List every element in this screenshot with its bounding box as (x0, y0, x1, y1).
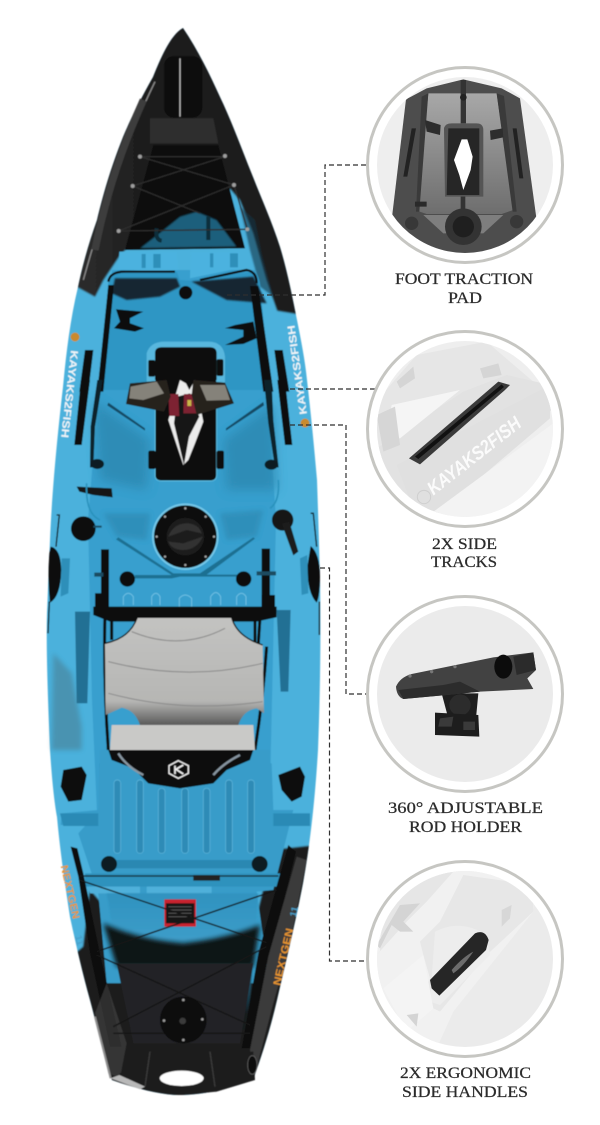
cockpit floor top (100, 270, 270, 390)
floor channels (114, 780, 254, 853)
faded deck picture (378, 872, 528, 1028)
disc (377, 77, 553, 253)
label: side handles: SIDE HANDLES (402, 1084, 528, 1101)
footwell holes (101, 856, 117, 872)
label: foot traction pad: PAD (448, 290, 482, 307)
right rear rail (242, 845, 296, 1048)
bow carry handle recess (164, 56, 202, 118)
label: side handles: 2X ERGONOMIC (400, 1065, 531, 1082)
round deck hatch (152, 503, 219, 570)
brand logo right (300, 418, 310, 428)
callout connector: rod holder (290, 425, 377, 694)
hull base colour (46, 28, 322, 1096)
model number left: 11 (72, 934, 85, 947)
bungee cords (119, 157, 247, 231)
brand text left: KAYAKS2FISH (58, 350, 80, 438)
callout connector: side handles (320, 568, 377, 961)
feature 1: foot traction pad (368, 68, 562, 262)
centre hatch (155, 380, 217, 481)
seat logo (169, 761, 188, 778)
rear tank well (107, 893, 258, 1043)
feature 4: side handles (363, 862, 562, 1056)
footwell (78, 763, 293, 983)
label: side handles (400, 1065, 531, 1101)
label: foot traction pad (395, 271, 533, 307)
label: side tracks: 2X SIDE (432, 536, 497, 553)
model text left: NEXTGEN (58, 864, 81, 920)
label: rod holder: 360° ADJUSTABLE (388, 800, 543, 817)
stern bottom (115, 1052, 255, 1095)
bungee anchors (117, 154, 249, 233)
stern details (58, 749, 310, 1095)
cockpit rails (97, 285, 273, 392)
label: foot traction pad: FOOT TRACTION (395, 271, 533, 288)
feature 3: rod holder (368, 596, 562, 792)
cockpit step line (86, 480, 279, 520)
floor holes (120, 571, 135, 587)
blue splash inside well (140, 212, 237, 248)
stern hull bands (95, 983, 127, 1078)
seat stitching (108, 628, 263, 706)
ring (368, 332, 562, 526)
cockpit floor (88, 270, 276, 810)
gunwale highlights (83, 82, 155, 280)
speaker mounts left (61, 767, 87, 802)
seat cushion (110, 725, 255, 750)
brand logo left (70, 332, 80, 342)
mid hull step (85, 873, 280, 887)
bow black colouring (77, 28, 296, 315)
drain plug (248, 1056, 257, 1074)
rod holder (272, 509, 293, 531)
handle (430, 932, 489, 996)
disc (377, 341, 553, 517)
brand text right: KAYAKS2FISH (286, 324, 310, 415)
cup holder (71, 516, 96, 541)
seat side recesses (75, 610, 291, 703)
side clip (77, 487, 113, 497)
side track (409, 382, 510, 464)
cockpit rails (90, 380, 279, 467)
floor sockets (91, 459, 104, 469)
mid deck details (48, 380, 320, 750)
seat frame (93, 607, 277, 622)
kayak hull (46, 27, 322, 1096)
seat back (105, 617, 264, 725)
ring (368, 862, 562, 1056)
left pedal (126, 380, 171, 412)
grayscale deck picture (392, 79, 537, 260)
rear rails (101, 549, 270, 607)
side tracks (79, 350, 289, 392)
model text right: NEXTGEN (272, 927, 296, 987)
faded deck picture (377, 343, 551, 512)
brand text: KAYAKS2FISH (423, 413, 527, 500)
left side handle (48, 547, 61, 603)
bow storage well (125, 145, 245, 250)
brackets (114, 309, 144, 332)
floor scallops (123, 592, 246, 607)
disc (377, 606, 553, 782)
footwell bands (61, 750, 310, 860)
ring (368, 596, 562, 792)
label: side tracks: TRACKS (431, 554, 497, 571)
right side handle (307, 546, 320, 603)
seat front (108, 750, 253, 788)
left rear rail (71, 847, 122, 1047)
drain hole (179, 286, 192, 299)
bow step (150, 118, 218, 143)
white pedal cavity (168, 380, 203, 465)
centre hatch (147, 342, 225, 392)
warning label (164, 899, 196, 927)
right pedal (192, 380, 234, 415)
label: side tracks (431, 536, 497, 571)
callout connector: side tracks (290, 388, 385, 390)
seat cushion lower (110, 749, 253, 760)
feature 2: side tracks (367, 332, 562, 532)
bow deck details (79, 56, 289, 392)
foot pads (118, 252, 179, 272)
red pedal mount (168, 394, 199, 416)
callout connector: foot traction pad (227, 165, 373, 295)
mottled floor (93, 400, 277, 490)
logo badge (417, 490, 431, 504)
label: rod holder (388, 800, 543, 836)
hatch latches (148, 451, 224, 469)
model number right: 11 (288, 905, 301, 918)
rear footwell step (103, 860, 267, 868)
seat logo mark (175, 765, 183, 774)
stern hatch (160, 997, 207, 1043)
side tracks (74, 380, 292, 445)
diagonal grooves (107, 402, 264, 431)
disc (377, 871, 553, 1047)
speaker mounts right (278, 767, 305, 802)
stern black colouring (77, 844, 310, 1096)
triangular grooves (116, 537, 255, 578)
bow mottling (240, 207, 273, 297)
ring (368, 68, 562, 262)
rod holder picture (396, 652, 536, 737)
lower hull scuffs (52, 653, 82, 750)
right stern band (250, 857, 307, 1080)
label: rod holder: ROD HOLDER (409, 819, 522, 836)
stern handle opening (160, 1071, 204, 1086)
hatch screws (155, 507, 215, 566)
hatch latches (148, 359, 223, 377)
bungee cords (79, 876, 278, 1033)
